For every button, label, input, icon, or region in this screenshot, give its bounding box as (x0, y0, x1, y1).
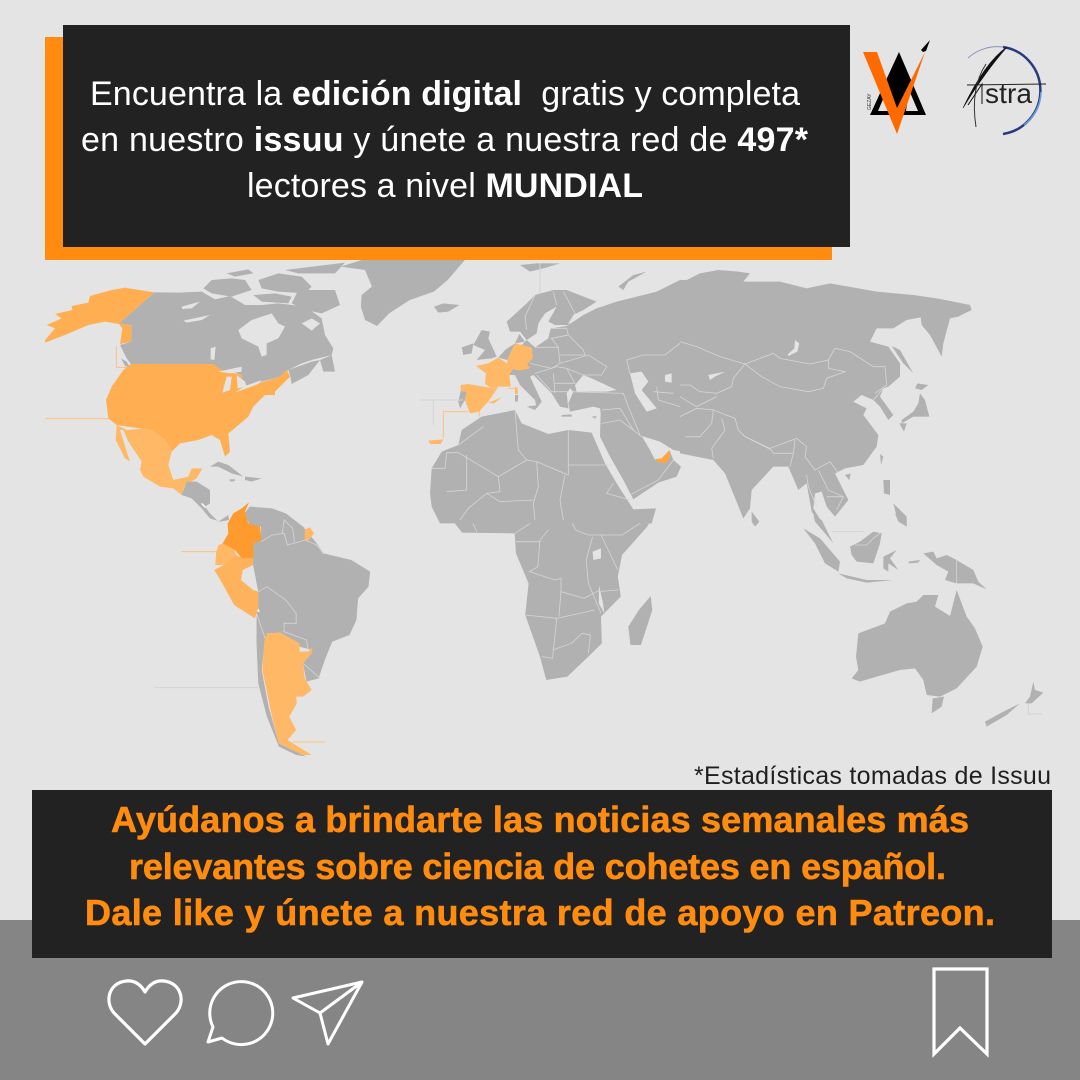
map: Borneo (850, 532, 882, 563)
map: Lake Balkhash (708, 372, 725, 380)
map: New Zealand (985, 682, 1043, 727)
footnote: source of the statistics: *Estadísticas tomadas de Issuu (694, 762, 1051, 790)
world map (45, 260, 1043, 757)
map: France (476, 358, 514, 388)
header panel (63, 25, 850, 247)
map: Lake Winnipeg (211, 347, 216, 360)
map: Greenland (341, 260, 465, 326)
map: Mediterranean islands (515, 395, 597, 419)
icon: heart (109, 981, 181, 1044)
map: Spain (461, 384, 498, 413)
header text (81, 75, 809, 205)
map: Spanish territory connector lines (420, 263, 540, 438)
map: Peru (214, 555, 258, 618)
map: Southeast Asia and Oceania (803, 513, 1043, 727)
map: Caribbean islands (210, 462, 262, 482)
map: Java and Lesser Sunda Islands (838, 573, 893, 583)
map: Hudson Bay (238, 313, 285, 357)
call-to-action text: relevantes sobre ciencia de cohetes en español. (129, 846, 946, 887)
map: Moluccas (908, 560, 920, 563)
map: Argentina (262, 633, 313, 755)
map: Germany (507, 343, 533, 371)
call-to-action text: Ayúdanos a brindarte las noticias semanales más (111, 799, 969, 840)
map: Lake Nicaragua (201, 503, 206, 507)
map: Asian mainland (680, 270, 972, 530)
map: Black Sea (575, 375, 617, 392)
icon: paper plane (293, 982, 362, 1044)
map: Europe, North Africa and the Middle East (420, 263, 688, 523)
map: overseas territory connector lines (45, 347, 325, 742)
icon: comment bubble (208, 982, 273, 1045)
map: Denmark (515, 334, 525, 343)
map: southern Africa and Madagascar (449, 503, 654, 680)
map: North and Central America (45, 263, 345, 558)
map: South America borders (257, 520, 324, 678)
map: Canary Islands (428, 439, 443, 444)
logo: Astra: stra (985, 78, 1032, 109)
map: Canada (119, 292, 333, 388)
call-to-action text (85, 799, 995, 933)
map: Malay Peninsula (813, 515, 833, 543)
map: French Guiana (305, 527, 314, 541)
header text: en nuestro issuu y únete a nuestra red de 497* (81, 121, 809, 159)
map: Balearic Islands (488, 397, 502, 403)
map: Mindanao (895, 513, 907, 527)
map: sub-Saharan Africa (449, 515, 654, 680)
map: Oceania borders (832, 532, 1043, 714)
map: Tasmania (932, 697, 944, 713)
call-to-action panel (32, 790, 1052, 958)
map: Lake Malawi (599, 585, 604, 613)
map: Europe and western Asia (507, 280, 688, 499)
logo: Gezay rocket (863, 40, 930, 134)
map: Low Countries (498, 343, 515, 360)
map: South America and Greenland (45, 260, 465, 757)
map: Great Lakes (218, 367, 262, 393)
header text: Encuentra la edición digital gratis y completa (90, 75, 800, 113)
map: Sulawesi (883, 550, 898, 572)
gray footer band (0, 920, 1080, 1080)
map: Novaya Zemlya and Svalbard (520, 263, 647, 290)
map: Lake Baikal (788, 340, 799, 356)
map: United States (106, 364, 290, 457)
logo: Gezay rocket: GEZAY (867, 93, 873, 110)
map: Nova Scotia and Newfoundland (288, 355, 335, 384)
map: Aral Sea (665, 373, 672, 383)
map: Philippines (883, 480, 907, 527)
map: Europe, North Africa and Middle East borders (432, 292, 680, 520)
map: Taiwan and Hainan (845, 454, 883, 480)
map: Asia (680, 270, 972, 530)
map: North Africa (430, 410, 656, 523)
map: Sumatra (803, 528, 840, 572)
map: Portugal (458, 391, 467, 408)
map: Vancouver Island (121, 358, 130, 367)
map: Colombia (223, 502, 262, 558)
map: Sri Lanka (752, 512, 759, 527)
map: Alaska (45, 288, 154, 344)
map: Australia (852, 590, 983, 697)
map: United Arab Emirates (655, 450, 670, 463)
map: Lake Titicaca (255, 607, 260, 612)
map: Great Slave Lake (182, 302, 200, 309)
map: Great Britain (473, 330, 497, 360)
map: southern Africa borders (468, 503, 645, 658)
map: Great Bear Lake (183, 315, 210, 323)
header text: lectores a nivel MUNDIAL (247, 167, 643, 205)
map: Madagascar (628, 596, 652, 645)
map: Caspian Sea (630, 372, 657, 412)
map: Japan (899, 383, 929, 432)
map: Sakhalin (892, 346, 913, 373)
map: Lake Victoria (593, 548, 601, 560)
map: Corsica (515, 387, 518, 394)
map: Canadian Arctic islands (203, 263, 345, 313)
map: Iceland (434, 303, 459, 313)
map: South America landmass (244, 507, 370, 757)
map: Mexico (116, 425, 202, 495)
orange offset panel behind the header (45, 37, 832, 260)
map: Ireland (462, 343, 473, 355)
map: New Guinea (923, 552, 987, 589)
call-to-action text: Dale like y únete a nuestra red de apoyo en Patreon. (85, 892, 995, 933)
map: Ecuador (215, 543, 236, 565)
map: Scandinavia (507, 290, 597, 340)
map: Asia borders (680, 342, 887, 510)
logo: Astra (963, 47, 1046, 134)
icon: bookmark (934, 969, 987, 1054)
map: Central America (182, 482, 229, 522)
